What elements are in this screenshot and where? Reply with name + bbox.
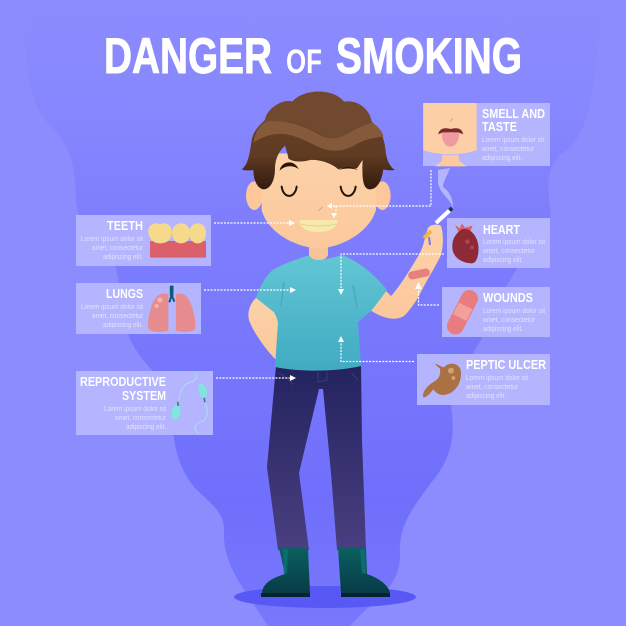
panel: heart: adipiscing elit. — [483, 255, 523, 264]
icon: lungs — [148, 286, 195, 332]
trousers — [267, 366, 366, 550]
panel: wounds: adipiscing elit. — [483, 324, 523, 333]
title: SMOKING — [336, 28, 522, 84]
icon: heart — [452, 223, 478, 263]
eyebrows — [280, 162, 299, 171]
panel: lungs: Lorem ipsum dolor sit — [81, 302, 143, 311]
eyes — [282, 187, 356, 196]
panel: lungs: amet, consectetur — [92, 311, 143, 320]
panel: teeth: adipiscing elit. — [103, 252, 143, 261]
icon: stomach — [423, 363, 461, 397]
title: DANGER — [104, 28, 272, 84]
panel: wounds: Lorem ipsum dolor sit — [483, 306, 545, 315]
mouth with yellow teeth — [299, 220, 338, 232]
panel: reproductive system: adipiscing elit. — [126, 422, 166, 431]
left arm — [248, 297, 279, 360]
shirt folds — [281, 282, 357, 308]
right arm with hand — [370, 225, 443, 319]
panel: heart: amet, consectetur — [483, 246, 535, 255]
panel: peptic ulcer: adipiscing elit. — [466, 391, 506, 400]
ground shadow — [234, 586, 416, 608]
arrow: heart — [338, 254, 444, 295]
title: OF — [286, 43, 322, 81]
icon: sperm cells — [170, 373, 208, 433]
character — [242, 92, 453, 597]
panel: peptic ulcer: amet, consectetur — [466, 382, 518, 391]
nose — [319, 207, 323, 210]
panel: smell and taste — [423, 103, 550, 166]
smoke — [438, 168, 453, 208]
panel: lungs: adipiscing elit. — [103, 320, 143, 329]
icon: teeth — [148, 223, 206, 258]
head — [242, 92, 395, 248]
panel: peptic ulcer: PEPTIC ULCER — [466, 357, 547, 372]
panel: reproductive system: REPRODUCTIVE — [80, 374, 166, 389]
panel: smell and taste: SMELL AND — [482, 106, 545, 121]
panel: reproductive system: amet, consectetur — [115, 413, 166, 422]
icon: bandage — [444, 287, 481, 337]
panel: wounds — [442, 287, 550, 337]
panel: teeth — [76, 215, 211, 266]
hair — [242, 92, 395, 189]
arrow: lungs — [204, 287, 296, 293]
panel: smell and taste: adipiscing elit. — [482, 153, 522, 162]
icon: mouth — [423, 103, 477, 166]
arrow: reproductive — [216, 375, 296, 381]
trouser pocket details — [278, 372, 358, 385]
shirt — [256, 255, 387, 371]
panel: peptic ulcer: Lorem ipsum dolor sit — [466, 373, 528, 382]
panel: heart — [447, 218, 550, 268]
panel: wounds: WOUNDS — [483, 290, 533, 305]
panel: heart: HEART — [483, 222, 520, 237]
panel: heart: Lorem ipsum dolor sit — [483, 237, 545, 246]
panel: lungs — [76, 283, 201, 334]
panel: lungs: LUNGS — [106, 286, 143, 301]
arrow: peptic — [338, 336, 414, 362]
panel: smell and taste: amet, consectetur — [482, 144, 534, 153]
bandage on arm — [407, 268, 431, 280]
panel: teeth: TEETH — [107, 218, 143, 233]
arrow: smell — [327, 170, 431, 218]
panel: smell and taste: Lorem ipsum dolor sit — [482, 135, 544, 144]
title — [104, 28, 522, 84]
panel: reproductive system — [76, 371, 213, 435]
panel: teeth: Lorem ipsum dolor sit — [81, 234, 143, 243]
panel: reproductive system: SYSTEM — [122, 388, 166, 403]
panel: smell and taste: TASTE — [482, 119, 517, 134]
panel: reproductive system: Lorem ipsum dolor sit — [104, 404, 166, 413]
hair top — [266, 92, 372, 138]
arrow: teeth — [214, 220, 295, 226]
cigarette — [424, 208, 452, 245]
arrow: wounds — [415, 282, 439, 305]
panel: wounds: amet, consectetur — [483, 315, 535, 324]
ears — [246, 181, 263, 210]
panel: teeth: amet, consectetur — [92, 243, 143, 252]
panel: peptic ulcer — [417, 354, 550, 405]
neck — [309, 245, 328, 260]
arrows — [204, 170, 444, 381]
neck front — [309, 254, 328, 260]
face — [262, 153, 376, 248]
boots — [261, 548, 390, 597]
hair highlight band — [253, 121, 383, 151]
